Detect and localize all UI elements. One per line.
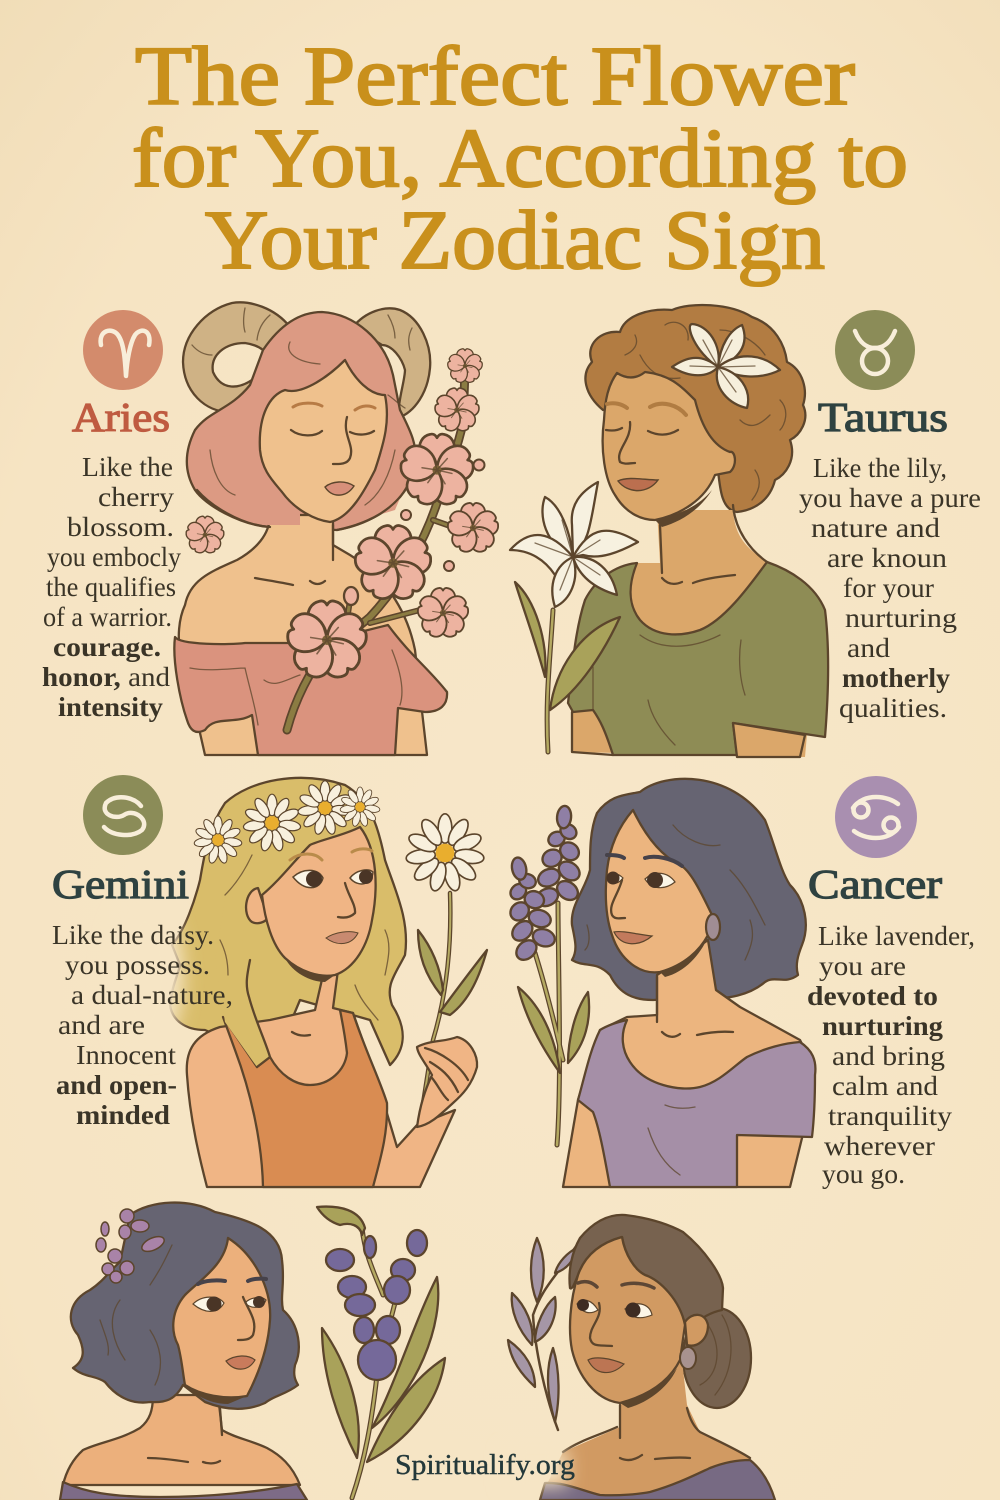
- icon: hair flowers: [96, 1209, 166, 1283]
- text: Aries description: the qualifies: [46, 572, 176, 602]
- panel: Taurus: [510, 305, 981, 757]
- text: Aries description: intensity: [58, 692, 164, 722]
- text: Gemini description: Like the daisy.: [52, 920, 214, 950]
- icon: daisy crown: [194, 781, 380, 864]
- text: Cancer description: you are: [819, 951, 906, 981]
- title: Your Zodiac Sign: [205, 194, 825, 287]
- heading: Cancer: Cancer: [808, 861, 942, 907]
- footer: website credit: Spiritualify.org: [395, 1450, 575, 1481]
- icon: Gemini symbol: [83, 775, 163, 855]
- text: Gemini description: a dual-nature,: [71, 980, 233, 1010]
- text: Gemini description: [52, 920, 233, 1130]
- heading: Gemini: Gemini: [52, 861, 189, 907]
- panel: Aries: [42, 302, 501, 755]
- text: Gemini description: you possess.: [65, 950, 210, 980]
- heading: Aries: Aries: [72, 394, 170, 440]
- text: Gemini description: Innocent: [76, 1040, 177, 1070]
- illustration: Taurus woman with curly hair: [568, 305, 828, 757]
- text: Cancer description: [807, 921, 975, 1189]
- text: Aries description: blossom.: [67, 512, 174, 542]
- illustration: bottom-left woman with dark hair: [60, 1203, 307, 1500]
- text: Taurus description: and: [847, 633, 891, 663]
- panel: Gemini: [52, 775, 487, 1187]
- text: Aries description: you embocly: [47, 542, 181, 572]
- text: Taurus description: qualities.: [839, 693, 947, 723]
- heading: Taurus: Taurus: [818, 394, 948, 440]
- text: Taurus description: are knoun: [827, 543, 948, 573]
- text: Taurus description: nurturing: [845, 603, 957, 633]
- text: Gemini description: and are: [58, 1010, 145, 1040]
- illustration: bottom-centre purple flowers: [317, 1207, 445, 1498]
- text: Cancer description: and bring: [832, 1041, 945, 1071]
- icon: Cancer symbol: [835, 776, 917, 858]
- text: Taurus description: for your: [843, 573, 934, 603]
- text: Aries description: of a warrior.: [43, 602, 172, 632]
- text: Aries description: courage.: [53, 632, 161, 662]
- text: Taurus description: nature and: [811, 513, 941, 543]
- text: Cancer description: Like lavender,: [818, 921, 975, 951]
- title: for You, According to: [132, 112, 908, 205]
- icon: lily in hair: [672, 324, 780, 408]
- illustration: lily: [510, 482, 638, 752]
- illustration: Cancer woman with dark wavy hair: [563, 779, 815, 1187]
- text: Cancer description: devoted to: [807, 981, 938, 1011]
- illustration: cherry blossom branch: [184, 349, 501, 730]
- illustration: Aries woman with ram horns: [174, 302, 447, 755]
- icon: Taurus symbol: [835, 310, 915, 390]
- text: Taurus description: [799, 453, 981, 723]
- text: Aries description: cherry: [98, 482, 175, 512]
- soft fade behind website credit: [505, 1450, 567, 1486]
- text: Taurus description: you have a pure: [799, 483, 981, 513]
- illustration: daisy: [405, 814, 487, 1127]
- text: Gemini description: and open-: [56, 1070, 177, 1100]
- text: Cancer description: you go.: [822, 1159, 905, 1189]
- illustration: Gemini woman with flower crown: [107, 778, 455, 1187]
- text: Cancer description: nurturing: [822, 1011, 944, 1041]
- text: Taurus description: Like the lily,: [813, 453, 947, 483]
- title: [132, 30, 908, 287]
- text: Cancer description: calm and: [832, 1071, 939, 1101]
- panel: Cancer: [494, 776, 975, 1189]
- text: Aries description: Like the: [82, 452, 173, 482]
- text: Aries description: honor, and: [42, 662, 171, 692]
- soft fade behind text: [107, 895, 183, 1055]
- icon: Aries symbol: [83, 310, 163, 390]
- illustration: lavender stems: [494, 804, 589, 1145]
- text: Aries description: [42, 452, 181, 722]
- title: The Perfect Flower: [135, 30, 855, 123]
- text: Cancer description: wherever: [824, 1131, 935, 1161]
- text: Gemini description: minded: [76, 1100, 170, 1130]
- illustration: bottom-right woman with bun: [508, 1215, 775, 1500]
- text: Taurus description: motherly: [842, 663, 951, 693]
- text: Cancer description: tranquility: [828, 1101, 953, 1131]
